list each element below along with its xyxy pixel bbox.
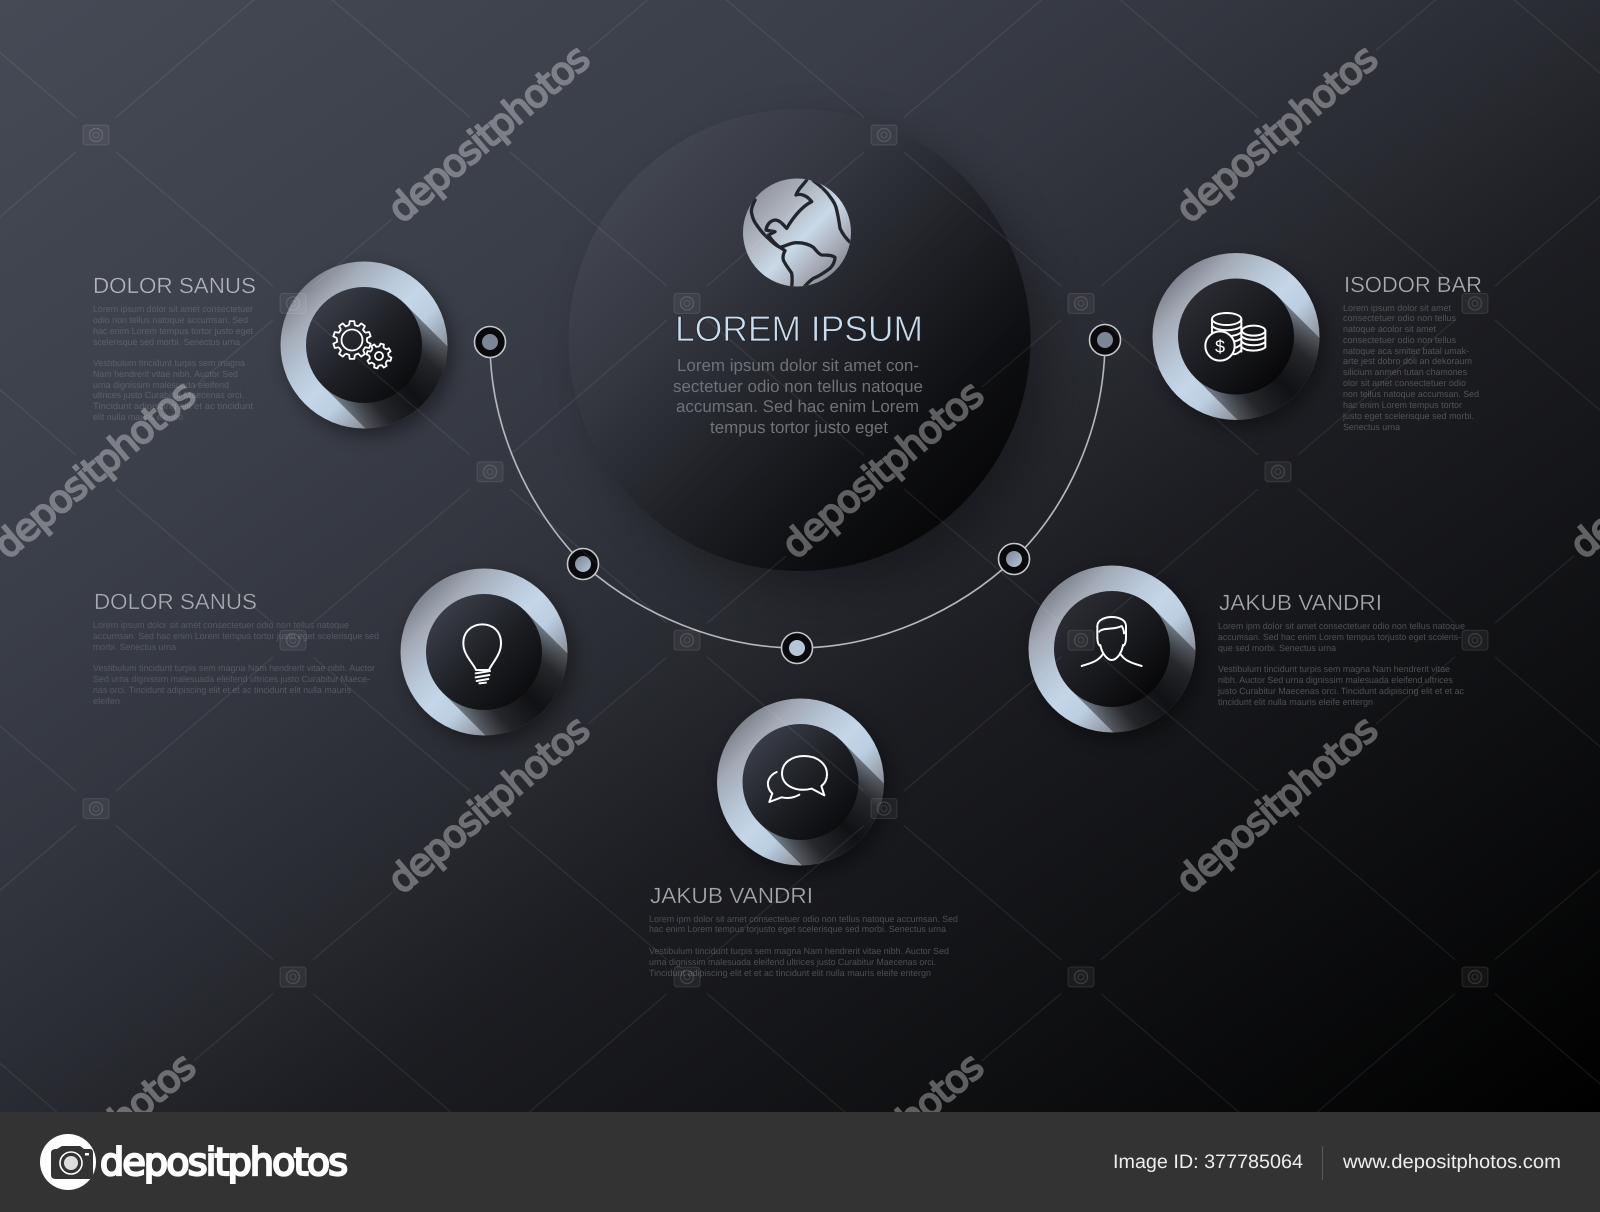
body text: eleifen — [93, 696, 120, 706]
body text: justo Curabitur Maecenas orci. Tincidunt adipiscing elit et et ac — [1217, 686, 1464, 696]
body text — [1217, 621, 1465, 707]
body text: natoque acolor sit amet — [1343, 324, 1436, 334]
central text block: sectetuer odio non tellus natoque — [673, 377, 923, 396]
body text: non tellus natoque accumsan. Sed — [1343, 389, 1479, 399]
badge: gears — [280, 262, 458, 441]
icon: footer camera logo — [40, 1134, 96, 1190]
body text — [1342, 303, 1479, 432]
body text: consectetuer odio non tellus — [1343, 335, 1456, 345]
panel: dolor sanus top — [93, 273, 256, 422]
central text block: accumsan. Sed hac enim Lorem — [676, 397, 919, 416]
icon: person — [1082, 617, 1142, 666]
icon: lightbulb — [463, 624, 501, 683]
body text: Tincidunt adipiscing elit et ac tincidunt — [93, 401, 254, 411]
body text: Vestibulum tincidunt turpis sem magna Nam hendrerit vitae nibh. Auctor — [93, 663, 375, 673]
body text: Vestibulum tincidunt turpis sem magna Nam hendrerit vitae — [1218, 664, 1450, 674]
body text: Vestibulum tincidunt turpis sem magna Nam hendrerit vitae nibh. Auctor Sed — [649, 946, 949, 956]
badge: chat — [717, 698, 886, 870]
body text: urna dignissim malesuada eleifend ultrices justo Curabitur Maecenas orci. — [649, 957, 936, 967]
body text — [93, 304, 254, 422]
body text: justo eget scelerisque sed morbi. — [1342, 411, 1474, 421]
panel: jakub vandri right — [1217, 590, 1465, 707]
central title: LOREM IPSUM — [675, 308, 923, 349]
badge: lightbulb — [400, 568, 576, 746]
body text: elit nulla mauris eleifen — [93, 412, 183, 422]
connector arc — [490, 340, 1105, 648]
body text: que sed morbi. Senectus urna — [1218, 643, 1336, 653]
icon: coins: $ — [1215, 336, 1225, 356]
body text: Lorem ipm dolor sit amet consectetuer odio non tellus natoque accumsan. Sed — [649, 914, 958, 924]
body text: arte jest dobro doli an dekoraum — [1343, 356, 1472, 366]
body text: Lorem ipsum dolor sit amet consectetuer — [93, 304, 253, 314]
badge: person — [1028, 566, 1196, 734]
body text: odio non tellus natoque accumsan. Sed — [93, 315, 248, 325]
image id: Image ID: 377785064 — [1113, 1151, 1303, 1173]
heading: DOLOR SANUS — [94, 589, 257, 614]
body text — [649, 914, 958, 978]
central circle panel — [610, 136, 1048, 588]
panel: dolor sanus bottom — [93, 589, 379, 706]
central text block — [673, 356, 923, 437]
panel: jakub vandri bottom — [649, 883, 958, 978]
body text: Lorem ipsum dolor sit amet consectetuer odio non tellus natoque — [93, 620, 349, 630]
icon: coins — [1205, 313, 1265, 361]
body text: hac enim Lorem tempus tortor — [1343, 400, 1462, 410]
footer logo wordmark: depositphotos — [100, 1140, 348, 1184]
body text: morbi. Senectus urna — [93, 642, 176, 652]
body text: urna dignissim malesuada eleifend — [93, 380, 229, 390]
body text: Lorem ipm dolor sit amet consectetuer odio non tellus natoque — [1218, 621, 1465, 631]
node 2 — [568, 548, 598, 580]
watermark texts: depositphotos — [379, 36, 598, 231]
central text block: Lorem ipsum dolor sit amet con- — [677, 356, 919, 375]
watermark texts: depositphotos — [379, 707, 598, 902]
node 3 — [782, 632, 812, 664]
heading: DOLOR SANUS — [93, 273, 256, 298]
body text: Nam hendrerit vitae nibh. Auctor Sed — [93, 369, 238, 379]
icon: gears — [332, 321, 394, 371]
panel: isodor bar — [1342, 272, 1482, 432]
body text: natoque aca smitec batal umak- — [1343, 346, 1469, 356]
heading: JAKUB VANDRI — [650, 883, 813, 908]
icon: globe — [743, 178, 851, 288]
node 5 — [1090, 324, 1120, 356]
body text: consectetuer odio non tellus — [1343, 313, 1456, 323]
node 1 — [474, 326, 506, 358]
body text: hac enim Lorem tempus torjusto eget scelerisque sed morbi. Senectus urna — [649, 924, 946, 934]
website url: www.depositphotos.com — [1342, 1151, 1561, 1173]
badge: coins — [1152, 253, 1325, 427]
body text: Senectus urna — [1343, 422, 1400, 432]
watermark texts: depositphotos — [1167, 36, 1386, 231]
body text: hac enim Lorem tempus tortor justo eget — [93, 326, 253, 336]
body text — [93, 620, 379, 706]
body text: Sed urna dignissim malesuada eleifend ultrices justo Curabitur Maece- — [93, 674, 370, 684]
central text block: tempus tortor justo eget — [710, 418, 888, 437]
body text: Vestibulum tincidunt turpis sem magna — [93, 358, 245, 368]
body text: silicium anmen tutan chamones — [1343, 367, 1467, 377]
node 4 — [998, 544, 1030, 574]
heading: JAKUB VANDRI — [1219, 590, 1382, 615]
body text: accumsan. Sed hac enim Lorem tempus torjusto eget scoleris- — [1218, 632, 1461, 642]
body text: ultrices justo Curabitur Maecenas orci. — [93, 390, 244, 400]
watermark texts: depositphotos — [1167, 707, 1386, 902]
body text: scelerisque sed morbi. Senectus urna — [93, 337, 240, 347]
body text: accumsan. Sed hac enim Lorem tempus tortor justo eget scelerisque sed — [93, 631, 379, 641]
heading: ISODOR BAR — [1344, 272, 1482, 297]
watermark texts: depositphotos — [773, 372, 992, 567]
body text: tincidunt elit nulla mauris eleife entergn — [1218, 697, 1373, 707]
body text: olor sit amet consectetuer odio — [1343, 378, 1466, 388]
body text: nas orci. Tincidunt adipiscing elit et et ac tincidunt elit nulla mauris — [93, 685, 351, 695]
body text: Lorem ipsum dolor sit amet — [1343, 303, 1451, 313]
body text: Tincidunt adipiscing elit et et ac tincidunt elit nulla mauris eleife entergn — [649, 968, 931, 978]
footer bar — [0, 1112, 1600, 1212]
body text: nibh. Auctor Sed urna dignissim malesuada eleifend ultrices — [1218, 675, 1453, 685]
icon: speech bubbles — [768, 756, 827, 802]
